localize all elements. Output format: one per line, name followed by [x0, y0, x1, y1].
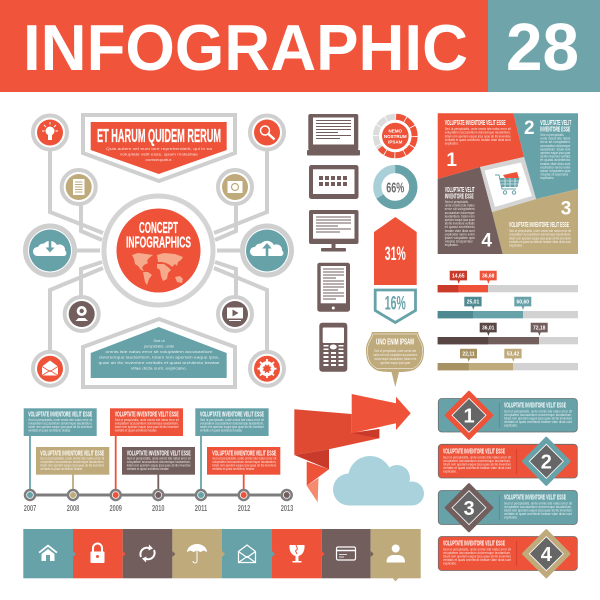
- bar row 2: 25,01: [467, 300, 479, 306]
- banner 4: Sed ut perspiciatis, unde omnis iste natus error sit: [443, 548, 511, 552]
- banner 1: veritatis et quasi architecto beatae vitae dicta sunt: [504, 420, 572, 424]
- concept diagram: [26, 115, 292, 387]
- text: teal quadrant: accusantium doloremque: [540, 144, 570, 148]
- text: brown quadrant: ipsam voluptatem quia: [445, 236, 475, 240]
- number 4: 4: [481, 231, 492, 252]
- icon: house: [38, 544, 58, 561]
- banner 2: VOLUPTATE INVENTORE VELIT ESSE: [443, 449, 505, 456]
- bar row 3: 36,01: [482, 326, 495, 332]
- timeline box 2007: veritatis et quasi architecto beatae: [28, 428, 70, 432]
- timeline box 2008: Sed ut perspiciatis, unde omnis iste natus error sit: [40, 456, 104, 460]
- timeline axis: [25, 490, 292, 500]
- text: red quadrant: VOLUPTATE INVENTORE VELIT ESSE: [445, 120, 506, 127]
- icon: light bulb: [33, 116, 67, 150]
- text: brown quadrant: ab illo inventore veritatis: [445, 222, 475, 226]
- icon strip: [23, 529, 421, 581]
- timeline box 2008: VOLUPTATE INVENTORE VELIT ESSE: [40, 450, 104, 457]
- icon: e-reader: [317, 263, 350, 312]
- text: tan quadrant: explicabo.: [509, 244, 523, 248]
- timeline years: 2010: [152, 503, 165, 513]
- 31 percent arrow: 31%: [385, 244, 406, 265]
- central circle: CONCEPT: [139, 220, 178, 237]
- text: red quadrant: totam rem aperiam eaque ipsa quae ab illo inventore: [445, 134, 511, 138]
- text: red quadrant: voluptatem accusantium doloremque laudantium,: [445, 131, 511, 135]
- speech bubble: natus error sit voluptatem accusantium: [373, 353, 418, 357]
- segmented donut: NEMO: [389, 128, 403, 134]
- banner 3: totam rem aperiam eaque ipsa quae ab illo inventore: [504, 508, 572, 512]
- text: teal quadrant: aperiam eaque ipsa quae: [540, 151, 570, 155]
- text: teal quadrant: INVENTORE ESSE: [540, 126, 570, 133]
- timeline box 2010: VOLUPTATE INVENTORE VELIT ESSE: [127, 450, 191, 457]
- timeline box 2007: [24, 408, 97, 436]
- bottom shield callout: quae ab illo inventore veritatis et quasi architecto beatae: [98, 360, 220, 365]
- text: teal quadrant: [540, 120, 572, 180]
- text: teal quadrant: laudantium, totam rem: [540, 147, 571, 151]
- timeline box 2011: [195, 408, 269, 436]
- bar row 4: 22,11: [462, 352, 475, 358]
- text: teal quadrant: explicabo nemo enim: [540, 165, 571, 169]
- text: brown quadrant: aperiam eaque ipsa quae: [445, 218, 475, 222]
- timeline box 2010: [122, 447, 195, 475]
- bottom shield callout: [83, 319, 235, 387]
- speech bubble: UNO ENIM IPSAM: [376, 337, 414, 346]
- timeline years: 2011: [195, 503, 207, 513]
- segmented donut: [376, 117, 415, 155]
- banner 2: explicabo.: [443, 470, 457, 474]
- banner 1: Sed ut perspiciatis, unde omnis iste natus error sit: [504, 410, 572, 414]
- bottom shield callout: Sed ut: [153, 338, 166, 343]
- icon: open envelope: [238, 545, 256, 562]
- text: brown quadrant: unde omnis iste natus: [445, 204, 475, 208]
- bar row 2: [438, 297, 578, 318]
- icon: refresh arrows: [140, 544, 155, 562]
- text: teal quadrant: ipsam voluptatem quia: [540, 169, 571, 173]
- timeline years: 2008: [67, 503, 79, 513]
- banner 1: [438, 392, 577, 439]
- timeline box 2010: voluptatem accusantium doloremque laudantium,: [127, 460, 191, 464]
- banner 4: explicabo.: [443, 562, 457, 566]
- 16 percent shield: [375, 290, 416, 322]
- text: teal quadrant: Sed ut perspiciatis,: [540, 133, 564, 137]
- top shield callout: consequatur.: [146, 157, 172, 162]
- icon: document: [62, 170, 96, 204]
- timeline: [24, 408, 293, 513]
- icon: laptop: [307, 114, 360, 156]
- timeline box 2011: veritatis et quasi architecto beatae: [200, 428, 242, 432]
- banner 4: totam rem aperiam eaque ipsa quae ab illo inventore: [443, 554, 511, 558]
- banner 1: totam rem aperiam eaque ipsa quae ab illo inventore: [504, 416, 572, 420]
- icon: credit card: [336, 547, 356, 560]
- banner 2: Sed ut perspiciatis, unde omnis iste natus error sit: [443, 456, 511, 460]
- timeline years: 2007: [24, 503, 36, 513]
- 66 percent donut: [377, 169, 413, 205]
- text: tan quadrant: Sed ut perspiciatis, unde omnis iste natus error sit: [509, 229, 571, 233]
- banner 4: [438, 530, 577, 577]
- icon: tablet: [309, 165, 358, 199]
- icon: fragile glass: [289, 545, 305, 562]
- timeline box 2010: Sed ut perspiciatis, unde omnis iste natus error sit: [127, 456, 191, 460]
- bar row 3: 72,18: [533, 326, 546, 332]
- icon: gear and wrench: [250, 352, 284, 386]
- timeline box 2012: veritatis et quasi architecto beatae: [212, 467, 254, 471]
- bar row 4: 53,42: [507, 352, 519, 358]
- timeline box 2010: totam rem aperiam eaque ipsa quae ab illo inventore: [127, 464, 191, 468]
- icon: envelope: [33, 352, 67, 386]
- timeline box 2011: VOLUPTATE INVENTORE VELIT ESSE: [200, 412, 264, 419]
- icon: video player: [218, 297, 252, 331]
- timeline box 2007: VOLUPTATE INVENTORE VELIT ESSE: [28, 412, 92, 419]
- text: brown quadrant: beatae vitae dicta sunt: [445, 229, 475, 233]
- speech bubble: Sed ut perspiciatis, unde omnis iste: [374, 349, 416, 353]
- banner 1: 1: [463, 406, 475, 428]
- banner 3: Sed ut perspiciatis, unde omnis iste natus error sit: [504, 502, 572, 506]
- text: brown quadrant: laudantium, totam rem: [445, 214, 475, 218]
- timeline years: [24, 503, 293, 513]
- timeline box 2012: Sed ut perspiciatis, unde omnis iste natus error sit: [212, 456, 276, 460]
- bar row 4: [438, 349, 578, 370]
- banner 2: veritatis et quasi architecto beatae vitae dicta sunt: [443, 466, 511, 470]
- panel: four part square: [438, 113, 578, 254]
- text: red quadrant: explicabo.: [445, 142, 459, 146]
- text: brown quadrant: [445, 187, 475, 247]
- text: brown quadrant: explicabo.: [445, 243, 459, 247]
- text: red quadrant: [445, 120, 511, 146]
- timeline box 2008: veritatis et quasi architecto beatae: [40, 467, 82, 471]
- banner 4: veritatis et quasi architecto beatae vitae dicta sunt: [443, 558, 511, 562]
- text: brown quadrant: voluptas sit aspernatur: [445, 240, 474, 244]
- text: teal quadrant: unde omnis iste natus: [540, 137, 571, 141]
- icon: umbrella: [187, 544, 207, 563]
- top shield callout: Quis autem vel eum iure reprehenderit, qui in ea: [106, 146, 213, 151]
- timeline years: 2013: [281, 503, 293, 513]
- text: red quadrant: veritatis et quasi architecto beatae vitae dicta sunt: [445, 138, 511, 142]
- banner 4: VOLUPTATE INVENTORE VELIT ESSE: [443, 541, 505, 548]
- icon: webcam: [65, 297, 99, 331]
- icon: cloud download: [26, 226, 74, 275]
- timeline box 2011: Sed ut perspiciatis, unde omnis iste natus error sit: [200, 418, 264, 422]
- number 3: 3: [561, 198, 571, 219]
- text: teal quadrant: et quasi architecto: [540, 158, 571, 162]
- connector lines: [50, 150, 267, 352]
- world map: [132, 253, 183, 285]
- header banner: [0, 0, 600, 92]
- timeline box 2008: voluptatem accusantium doloremque laudantium,: [40, 460, 104, 464]
- text: tan quadrant: voluptatem accusantium doloremque laudantium,: [509, 233, 571, 237]
- number 1: 1: [446, 150, 457, 171]
- timeline box 2010: veritatis et quasi architecto beatae: [127, 467, 169, 471]
- 66 percent donut: 66%: [386, 180, 404, 197]
- timeline box 2007: Sed ut perspiciatis, unde omnis iste natus error sit: [28, 418, 92, 422]
- timeline box 2009: [110, 408, 183, 436]
- cloud: [333, 456, 424, 506]
- bar row 1: 36,68: [482, 274, 495, 280]
- text: red quadrant: Sed ut perspiciatis, unde omnis iste natus error sit: [445, 127, 511, 131]
- timeline box 2009: totam rem aperiam eaque ipsa quae ab illo inventore: [115, 425, 179, 429]
- bottom shield callout: vitae dicta sunt, explicabo.: [131, 366, 187, 370]
- text: brown quadrant: explicabo nemo enim: [445, 232, 475, 236]
- timeline box 2009: Sed ut perspiciatis, unde omnis iste natus error sit: [115, 418, 179, 422]
- banner 3: veritatis et quasi architecto beatae vitae dicta sunt: [504, 512, 572, 516]
- text: tan quadrant: totam rem aperiam eaque ipsa quae ab illo inventore: [509, 236, 571, 240]
- timeline stems: [30, 436, 244, 495]
- timeline box 2012: totam rem aperiam eaque ipsa quae ab illo inventore: [212, 464, 276, 468]
- central circle: INFOGRAPHICS: [126, 235, 191, 252]
- bar row 1: [438, 271, 578, 292]
- timeline box 2012: voluptatem accusantium doloremque laudantium,: [212, 460, 276, 464]
- central circle: [104, 196, 213, 305]
- bottom shield callout: omnis iste natus error sit voluptatem accusantium: [106, 349, 212, 354]
- timeline box 2009: VOLUPTATE INVENTORE VELIT ESSE: [115, 412, 179, 419]
- segmented donut: IPSAM: [388, 140, 403, 144]
- speech bubble: aperiam eaque ipsa quae: [380, 361, 410, 365]
- timeline box 2012: [207, 447, 280, 475]
- bar chart: [438, 271, 578, 370]
- icon: camera: [218, 170, 252, 204]
- segmented donut: NOSTRUM: [384, 134, 407, 139]
- banner 2: 2: [541, 452, 552, 474]
- text: brown quadrant: et quasi architecto: [445, 225, 475, 229]
- banner 1: voluptatem accusantium doloremque laudantium,: [504, 413, 572, 417]
- timeline box 2011: voluptatem accusantium doloremque laudantium,: [200, 422, 264, 426]
- timeline box 2007: voluptatem accusantium doloremque laudantium,: [28, 422, 92, 426]
- 31 percent arrow: [374, 217, 417, 285]
- banner 2: totam rem aperiam eaque ipsa quae ab illo inventore: [443, 462, 511, 466]
- timeline box 2009: voluptatem accusantium doloremque laudantium,: [115, 422, 179, 426]
- banner 3: 3: [463, 498, 475, 520]
- speech bubble: [366, 332, 424, 387]
- icon: mobile phone: [319, 323, 347, 372]
- bottom shield callout: perspiciatis, unde: [144, 344, 174, 348]
- header banner: 28: [506, 10, 579, 85]
- text: teal quadrant: voluptas sit aspernatur: [540, 173, 569, 177]
- banner 2: voluptatem accusantium doloremque laudantium,: [443, 459, 511, 463]
- header banner: INFOGRAPHIC: [23, 11, 468, 84]
- origami arrow: [294, 394, 411, 502]
- banner 2: [438, 438, 577, 485]
- top shield callout: voluptate velit esse, quam molestiae: [120, 152, 198, 156]
- bar row 1: 14,65: [452, 274, 465, 280]
- timeline years: 2009: [109, 503, 122, 513]
- banner 1: explicabo.: [504, 424, 518, 428]
- banner 3: explicabo.: [504, 516, 518, 520]
- text: brown quadrant: Sed ut perspiciatis,: [445, 200, 469, 204]
- top shield callout: [83, 115, 235, 181]
- timeline box 2008: [36, 447, 109, 475]
- text: teal quadrant: ab illo inventore veritatis: [540, 155, 571, 159]
- panel: four part square: VOLUPTATE VELIT: [445, 187, 475, 194]
- timeline box 2009: veritatis et quasi architecto beatae: [115, 428, 157, 432]
- timeline years: 2012: [238, 503, 250, 513]
- panel: four part square: INVENTORE ESSE: [445, 193, 474, 200]
- icon: padlock: [90, 544, 104, 563]
- text: brown quadrant: accusantium doloremque: [445, 211, 475, 215]
- banner 4: 4: [541, 544, 553, 566]
- speech bubble: doloremque laudantium, totam rem: [374, 357, 417, 361]
- 16 percent shield: 16%: [385, 294, 406, 314]
- icon: magnifier: [250, 116, 284, 150]
- banner 3: voluptatem accusantium doloremque laudantium,: [504, 505, 572, 509]
- text: brown quadrant: error sit voluptatem: [445, 207, 475, 211]
- timeline box 2012: VOLUPTATE INVENTORE VELIT ESSE: [212, 450, 276, 457]
- text: teal quadrant: error sit voluptatem: [540, 140, 571, 144]
- bottom shield callout: doloremque laudantium, totam rem aperiam eaque ipsa,: [99, 354, 219, 360]
- timeline box 2008: totam rem aperiam eaque ipsa quae ab illo inventore: [40, 464, 104, 468]
- icon: person: [386, 544, 405, 562]
- text: tan quadrant: veritatis et quasi architecto beatae vitae dicta sunt: [509, 240, 571, 244]
- icon: shopping cart: [495, 172, 520, 194]
- banner 3: [438, 484, 577, 531]
- text: tan quadrant: [509, 222, 571, 248]
- timeline box 2011: totam rem aperiam eaque ipsa quae ab illo inventore: [200, 425, 264, 429]
- number 2: 2: [524, 118, 535, 139]
- banner 4: voluptatem accusantium doloremque laudantium,: [443, 551, 511, 555]
- timeline box 2007: totam rem aperiam eaque ipsa quae ab illo inventore: [28, 425, 92, 429]
- bar row 3: [438, 323, 578, 344]
- icon: desktop monitor: [309, 210, 358, 252]
- text: teal quadrant: beatae vitae dicta sunt: [540, 162, 570, 166]
- bar row 2: 60,60: [517, 300, 529, 306]
- top shield callout: ET HARUM QUIDEM RERUM: [97, 126, 221, 146]
- icon: cloud upload: [242, 226, 292, 275]
- text: teal quadrant: explicabo.: [540, 176, 554, 180]
